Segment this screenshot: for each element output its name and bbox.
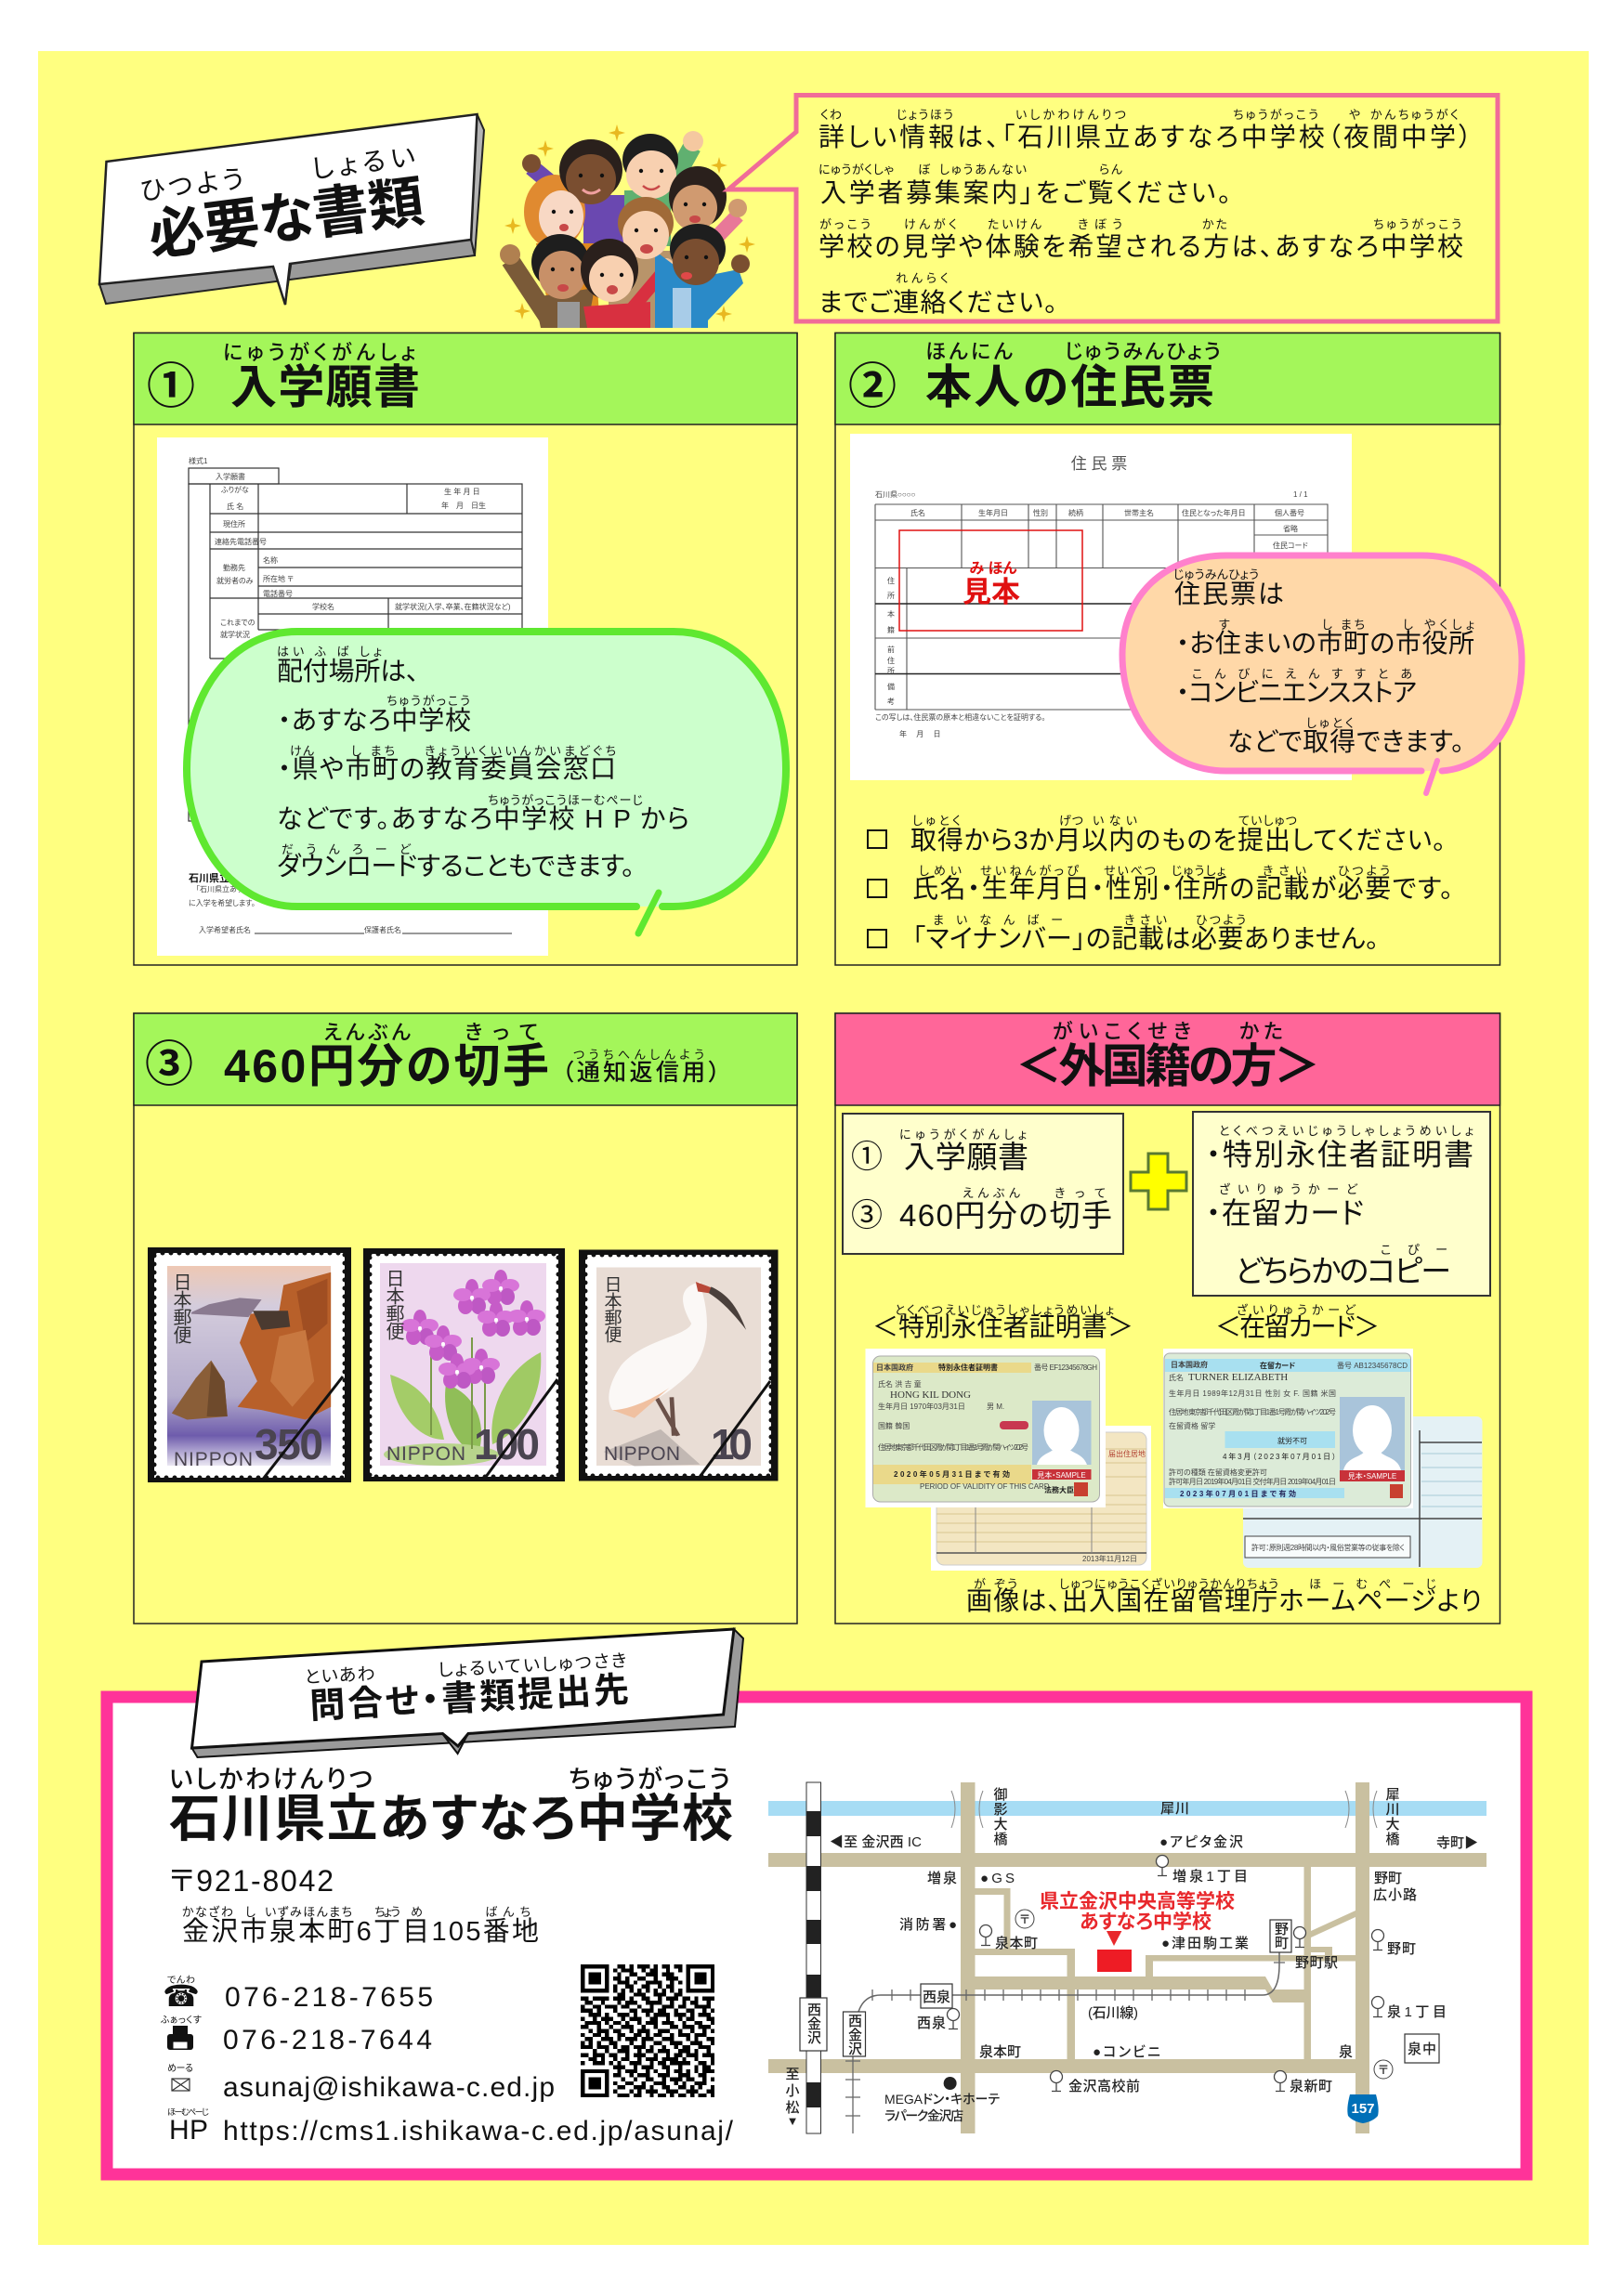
- map labels: 野町駅: [1295, 1955, 1338, 1971]
- checklist item 3: 「マイナンバー」の記載は必要ありません。: [912, 924, 1379, 953]
- callout line 3: [819, 217, 1463, 261]
- homepage row: ほーむぺーじ: [167, 2107, 209, 2117]
- checklist item 2: [868, 864, 1453, 903]
- map labels: ●アピタ金沢: [1159, 1834, 1243, 1850]
- stamp: 100 yen primrose flowers: [363, 1248, 565, 1481]
- bubble text: city hall and convenience store: などで取得できます。: [1227, 727, 1464, 756]
- checklist item 1: 取得から3か月以内のものを提出してください。: [910, 826, 1446, 854]
- image: special permanent resident certificate sample: 見本・SAMPLE: [1037, 1470, 1086, 1480]
- bubble text: where to get forms: きょういくいいんかいまどぐち: [425, 744, 616, 758]
- address: 金沢市泉本町6丁目105番地: [182, 1916, 539, 1947]
- map labels: 寺町▶: [1436, 1835, 1478, 1851]
- panel 3 header: （通知返信用）: [562, 1060, 720, 1086]
- checklist item 2: ひつよう: [1338, 864, 1390, 878]
- panel 1: application form: [134, 333, 797, 965]
- address: ちょう: [374, 1905, 400, 1919]
- panel 4 header: [835, 1013, 1500, 1105]
- panel 1 header: にゅうがくがんしょ: [223, 341, 415, 364]
- panel 1 header: 入学願書: [230, 361, 420, 413]
- roads: [768, 1782, 1486, 2133]
- school location marker: [1040, 1891, 1235, 1972]
- checklist item 2: しめい: [919, 864, 962, 878]
- image: residence card sample: 生年月日 1989年12月31日 性別 女 F. 国籍 米国: [1169, 1389, 1336, 1398]
- map labels: 泉: [1339, 2044, 1353, 2060]
- checklist item 3: きさい: [1124, 913, 1167, 927]
- sample resident certificate image: 住 民 票: [1071, 455, 1127, 473]
- map labels: 泉1丁目: [1387, 2004, 1447, 2020]
- label: residence card: ＜在留カード＞: [1215, 1312, 1380, 1341]
- sample application form image: 連絡先電話番号: [215, 537, 267, 546]
- map labels: 野町: [1374, 1871, 1402, 1886]
- checklist item 1: [868, 814, 1446, 854]
- image: special permanent resident certificate sample: 特別永住者証明書: [938, 1363, 998, 1372]
- stamp: 10 yen crested ibis: 日本郵便: [602, 1275, 622, 1343]
- fax row: ふぁっくす: [161, 2015, 202, 2026]
- title speech bubble: required documents: [99, 114, 484, 305]
- sample resident certificate image: 見本: [963, 576, 1020, 608]
- illustration: cheering diverse group of people: [500, 124, 755, 328]
- panel 2 header: [835, 333, 1500, 424]
- map labels: 泉中: [1408, 2042, 1436, 2057]
- bubble text: where to get forms: はい ふ ば しょ: [277, 645, 382, 659]
- callout line 3: かた: [1202, 217, 1227, 231]
- map labels: 野町: [1387, 1941, 1416, 1957]
- telephone row: [163, 1975, 433, 2014]
- map labels: 増泉1丁目: [1172, 1868, 1248, 1885]
- contact heading speech bubble: 問合せ・書類提出先: [308, 1671, 630, 1727]
- map labels: 増泉: [927, 1870, 957, 1886]
- river: [768, 1801, 1486, 1816]
- sample application form image: 氏 名: [227, 502, 243, 511]
- sample application form image: 勤務先: [223, 563, 245, 572]
- sample resident certificate image: 世帯主名: [1124, 508, 1154, 517]
- address: かなざわ: [182, 1905, 233, 1919]
- homepage row: https://cms1.ishikawa-c.ed.jp/asunaj/: [223, 2116, 734, 2146]
- checklist item 2: 氏名・生年月日・性別・住所の記載が必要です。: [912, 874, 1453, 903]
- image: special permanent resident certificate sample: 日本国政府: [876, 1363, 913, 1372]
- sample application form image: これまでの: [220, 619, 255, 627]
- image: residence card sample: 在留資格 留学: [1169, 1421, 1215, 1430]
- checklist item 2: じゅうしょ: [1172, 864, 1225, 878]
- panel 3 header: 460円分の切手: [224, 1040, 549, 1092]
- box: common documents 1 and 3: [843, 1114, 1123, 1254]
- image: residence card sample: 4年3月（2023年07月01日）: [1223, 1452, 1336, 1461]
- image: residence card sample: 就労不可: [1277, 1436, 1307, 1445]
- image: residence card sample: 2023年07月01日まで有効: [1180, 1489, 1296, 1498]
- map labels: MEGAドン・キホーテ: [884, 2092, 1000, 2107]
- fax row: 076-218-7644: [223, 2025, 432, 2055]
- image: special permanent resident certificate sample: 2020年05月31日まで有効: [894, 1469, 1010, 1479]
- callout line 2: [819, 163, 1231, 207]
- callout line 4: れんらく: [896, 271, 949, 285]
- stamp: 100 yen primrose flowers: NIPPON: [386, 1443, 465, 1465]
- callout line 2: 入学者募集案内」をご覧ください。: [820, 178, 1231, 207]
- contact heading speech bubble: といあわ: [304, 1664, 375, 1688]
- sample resident certificate image: 前: [887, 645, 895, 654]
- image: special permanent resident certificate sample: 氏名 洪 吉 童: [878, 1379, 922, 1389]
- map labels: ●コンビニ: [1093, 2044, 1160, 2060]
- box: common documents 1 and 3: ①: [851, 1140, 883, 1175]
- sample application form image: に入学を希望します。: [189, 898, 255, 907]
- sample resident certificate image: 省略: [1283, 524, 1298, 533]
- checklist item 2: きさい: [1263, 864, 1306, 878]
- callout line 1: いしかわけんりつ: [1015, 108, 1126, 122]
- title speech bubble: required documents: 必要な書類: [145, 170, 427, 267]
- homepage row: HP: [169, 2115, 208, 2146]
- sample application form image: 生 年 月 日: [444, 487, 480, 496]
- route 157 shield: 157: [1351, 2101, 1375, 2117]
- map labels: 〒: [1378, 2063, 1389, 2077]
- panel 2 header: ②: [848, 360, 897, 414]
- checklist item 1: げつ: [1059, 814, 1083, 828]
- callout: more information: [728, 95, 1498, 321]
- box: common documents 1 and 3: ③: [851, 1198, 883, 1233]
- box: residence certificate or card copy: ・在留カード: [1206, 1196, 1364, 1230]
- image: residence card sample: 日本国政府: [1171, 1360, 1208, 1369]
- callout line 1: [819, 108, 1472, 151]
- box: residence certificate or card copy: ・特別永住者証明書: [1206, 1138, 1473, 1171]
- map labels: [785, 1787, 1478, 2128]
- sample application form image: 就学状況: [220, 630, 250, 639]
- Ishikawa line railway: 野町: [1273, 1922, 1289, 1950]
- bubble text: where to get forms: ・県や市町の教育委員会窓口: [278, 754, 616, 783]
- telephone row: ☎: [163, 1978, 200, 2014]
- school location marker: 県立金沢中央高等学校: [1040, 1891, 1235, 1912]
- title speech bubble: required documents: ひつよう: [138, 164, 245, 206]
- image: special permanent resident certificate sample: 生年月日 1970年03月31日: [878, 1402, 965, 1411]
- box: residence certificate or card copy: [1193, 1112, 1490, 1296]
- school name: いしかわけんりつ: [169, 1766, 373, 1794]
- sample resident certificate image: 生年月日: [978, 508, 1008, 517]
- bubble text: where to get forms: ダウンロードすることもできます。: [277, 852, 635, 881]
- box: residence certificate or card copy: ざいりゅうかーど: [1219, 1182, 1358, 1196]
- sample resident certificate image: 氏名: [910, 508, 925, 517]
- fax row: [161, 2015, 432, 2055]
- map labels: 広小路: [1373, 1887, 1417, 1903]
- checklist item 3: [868, 913, 1379, 953]
- callout line 2: にゅうがくしゃ: [819, 163, 894, 176]
- image: residence card sample: 住居地 東京都千代田区霞が関1丁目1番1号霞が関ハイツ202号: [1169, 1407, 1336, 1416]
- sample application form image: 電話番号: [263, 589, 293, 598]
- Ishikawa line railway: 西泉: [923, 1989, 950, 2005]
- callout line 1: 詳しい情報は、「石川県立あすなろ中学校（夜間中学）: [819, 123, 1472, 151]
- sample resident certificate image: 住: [887, 656, 895, 665]
- sample application form image: 年 月 日生: [441, 501, 486, 510]
- map labels: ▼: [787, 2114, 798, 2128]
- image: special permanent resident certificate sample: 法務大臣: [1044, 1485, 1074, 1494]
- panel 2 header: じゅうみんひょう: [1065, 340, 1221, 363]
- callout line 4: までご連絡ください。: [819, 288, 1057, 317]
- checklist item 3: ひつよう: [1196, 913, 1246, 927]
- JR railway line: [800, 1782, 827, 2133]
- sample application form image: 現住所: [223, 519, 245, 528]
- panel 3: postage stamps: [134, 1013, 797, 1624]
- bubble text: city hall and convenience store: じゅうみんひょう: [1173, 567, 1259, 581]
- stamp: 350 yen cliffs: 日本郵便: [170, 1272, 191, 1344]
- bubble text: city hall and convenience store: し やくしょ: [1403, 618, 1474, 632]
- sample resident certificate image: 個人番号: [1275, 508, 1304, 517]
- email row: めーる: [167, 2063, 193, 2074]
- icon: plus sign: [1131, 1154, 1186, 1209]
- sample application form image: 就労者のみ: [216, 576, 254, 585]
- sample application form image: [157, 437, 548, 956]
- bubble text: city hall and convenience store: ・お住まいの市町の市役所: [1176, 629, 1474, 658]
- sample application form image: 入学願書: [216, 472, 245, 481]
- school name: 石川県立あすなろ中学校: [169, 1790, 733, 1847]
- callout line 3: たいけん: [988, 217, 1041, 231]
- image: residence card sample: 在留カード: [1260, 1361, 1296, 1370]
- panel 1 header: ①: [147, 360, 195, 414]
- callout line 1: や: [1349, 108, 1360, 122]
- sample resident certificate image: 備: [887, 682, 895, 691]
- box: residence certificate or card copy: とくべつえいじゅうしゃしょうめいしょ: [1219, 1124, 1473, 1138]
- sample resident certificate image: この写しは、住民票の原本と相違ないことを証明する。: [875, 712, 1045, 722]
- panel 2 header: 本人の住民票: [925, 361, 1214, 413]
- callout line 1: くわ: [820, 108, 842, 122]
- map labels: 小: [785, 2083, 800, 2099]
- bubble text: where to get forms: ちゅうがっこう: [386, 694, 470, 708]
- panel 3 header: きって: [465, 1021, 538, 1044]
- sample application form image: 学校名: [312, 602, 334, 611]
- sample resident certificate image: 住民コード: [1273, 541, 1308, 550]
- map labels: 犀川: [1160, 1801, 1189, 1817]
- stamp: 350 yen cliffs: 350: [255, 1420, 323, 1468]
- map labels: 泉本町: [979, 2044, 1021, 2060]
- bubble text: where to get forms: だ う ん ろ ー ど: [282, 842, 412, 856]
- sample application form image: 所在地 〒: [263, 574, 294, 583]
- school name: ちゅうがっこう: [569, 1766, 730, 1794]
- sample application form image: 就学状況(入学、卒業、在籍状況など): [395, 602, 511, 611]
- telephone row: でんわ: [167, 1975, 195, 1986]
- image credit text: ほ ー む ぺ ー じ: [1309, 1577, 1436, 1591]
- box: common documents 1 and 3: きって: [1054, 1186, 1106, 1200]
- bubble text: city hall and convenience store: し まち: [1322, 618, 1365, 632]
- sample resident certificate image: 本: [887, 609, 895, 619]
- callout line 3: がっこう: [819, 217, 871, 231]
- box: residence certificate or card copy: どちらかのコピー: [1235, 1254, 1451, 1288]
- checklist item 1: いない: [1093, 814, 1137, 828]
- bubble text: city hall and convenience store: ・コンビニエンスストア: [1176, 678, 1417, 707]
- map labels: 至: [785, 2067, 800, 2082]
- box: common documents 1 and 3: にゅうがくがんしょ: [899, 1128, 1027, 1141]
- email row: [167, 2063, 555, 2103]
- postal code: 〒921-8042: [169, 1864, 334, 1898]
- bubble text: where to get forms: などです。あすなろ中学校 H P から: [277, 804, 689, 833]
- box: residence certificate or card copy: こ ぴ ー: [1381, 1243, 1447, 1257]
- stamp: 10 yen crested ibis: NIPPON: [604, 1443, 680, 1465]
- sample resident certificate image: 年 月 日: [899, 729, 940, 738]
- panel 2 header: ほんにん: [925, 340, 1013, 363]
- bubble text: where to get forms: ちゅうがっこうほーむぺーじ: [488, 793, 643, 807]
- address: め: [411, 1905, 423, 1919]
- Ishikawa line railway: [844, 1920, 1291, 2133]
- sample application form image: ふりがな: [221, 485, 249, 494]
- stamp: 350 yen cliffs: NIPPON: [174, 1449, 253, 1470]
- distribution locations speech bubble: [187, 632, 786, 933]
- Ishikawa line railway: (石川線): [1088, 2005, 1138, 2021]
- stamp: 350 yen cliffs: [148, 1247, 351, 1482]
- image: residence card sample: 許可の種類 在留資格変更許可: [1169, 1468, 1267, 1477]
- route 157 shield: [1347, 2094, 1379, 2123]
- image: special permanent resident certificate sample: [866, 1349, 1151, 1571]
- image: special permanent resident certificate sample: 国籍 韓国: [878, 1421, 910, 1430]
- image credit text: しゅつにゅうこくざいりゅうかんりちょう: [1059, 1577, 1278, 1591]
- where to obtain certificate speech bubble: [1122, 555, 1522, 793]
- image: special permanent resident certificate sample: 届出住居地: [1108, 1449, 1146, 1458]
- callout line 1: かんちゅうがく: [1370, 108, 1459, 122]
- checklist item 2: せいべつ: [1104, 864, 1156, 878]
- panel 3 header: つうちへんしんよう: [573, 1048, 704, 1062]
- Ishikawa line railway: 西金沢: [846, 2014, 862, 2055]
- contact heading speech bubble: しょるいていしゅつさき: [438, 1651, 627, 1681]
- sample resident certificate image: 住民となった年月日: [1182, 508, 1246, 517]
- label: special permanent resident certificate: ＜特別永住者証明書＞: [872, 1312, 1133, 1341]
- map labels: 消防署●: [899, 1917, 957, 1933]
- sample resident certificate image: 性別: [1033, 508, 1048, 517]
- map labels: ◀至 金沢西 IC: [830, 1834, 922, 1850]
- sample resident certificate image: 1 / 1: [1293, 490, 1308, 499]
- telephone row: 076-218-7655: [225, 1982, 433, 2013]
- callout line 1: ちゅうがっこう: [1233, 108, 1318, 122]
- map labels: 松: [785, 2100, 800, 2116]
- image: residence card sample: [1163, 1349, 1483, 1568]
- map labels: 泉本町: [995, 1936, 1038, 1951]
- map labels: 〒: [1019, 1912, 1030, 1926]
- panel: contact and submission destination: [107, 1697, 1526, 2174]
- label: residence card: ざいりゅうかーど: [1237, 1303, 1356, 1317]
- panel 3 header: [134, 1013, 797, 1105]
- checklist for resident certificate: [868, 814, 1453, 953]
- sample resident certificate image: み ほん: [969, 560, 1017, 577]
- callout line 3: ちゅうがっこう: [1373, 217, 1461, 231]
- callout line 2: しゅうあんない: [939, 163, 1027, 176]
- checklist item 1: しゅとく: [912, 814, 961, 828]
- bubble text: where to get forms: ・あすなろ中学校: [278, 706, 471, 735]
- sample application form image: 様式1: [189, 456, 208, 465]
- panel 4 header: ＜外国籍の方＞: [1015, 1040, 1320, 1092]
- bubble text: city hall and convenience store: [1173, 567, 1474, 756]
- callout line 2: らん: [1099, 163, 1122, 176]
- sample resident certificate image: [850, 434, 1352, 780]
- bubble text: city hall and convenience store: しゅとく: [1306, 716, 1354, 730]
- image: special permanent resident certificate sample: PERIOD OF VALIDITY OF THIS CARD: [920, 1482, 1050, 1491]
- callout line 3: けんがく: [904, 217, 957, 231]
- sample resident certificate image: 続柄: [1068, 508, 1083, 517]
- bubble text: city hall and convenience store: こ ん び に え ん す す と あ: [1192, 667, 1412, 681]
- panel 2: resident certificate: [835, 333, 1522, 965]
- callout line 4: [819, 271, 1057, 317]
- image: residence card sample: 氏名: [1169, 1373, 1184, 1382]
- image: residence card sample: 許可年月日 2019年04月01日 交付年月日 2019年04月01日: [1169, 1477, 1336, 1486]
- bubble text: city hall and convenience store: 住民票は: [1174, 580, 1284, 608]
- label: special permanent resident certificate: とくべつえいじゅうしゃしょうめいしょ: [895, 1303, 1114, 1317]
- address: ばんち: [485, 1905, 530, 1919]
- image: special permanent resident certificate sample: 2013年11月12日: [1082, 1554, 1137, 1563]
- panel 3 header: ③: [145, 1038, 193, 1092]
- callout line 3: 学校の見学や体験を希望される方は、あすなろ中学校: [819, 232, 1463, 261]
- school location marker: あすなろ中学校: [1080, 1911, 1211, 1933]
- email row: asunaj@ishikawa-c.ed.jp: [223, 2072, 555, 2103]
- panel 1 header: [134, 333, 797, 424]
- image: special permanent resident certificate sample: HONG KIL DONG: [890, 1389, 971, 1401]
- sample application form image: 入学希望者氏名: [199, 925, 251, 934]
- map labels: ●GS: [980, 1871, 1015, 1886]
- image: residence card sample: TURNER ELIZABETH: [1188, 1372, 1288, 1383]
- box: common documents 1 and 3: えんぶん: [963, 1186, 1020, 1200]
- image: special permanent resident certificate sample: 住居地 東京都千代田区霞が関1丁目1番1号霞が関ハイツ202号: [878, 1442, 1028, 1452]
- sample resident certificate image: 石川県○○○○: [875, 490, 915, 499]
- sample resident certificate image: 所: [887, 666, 895, 675]
- box: common documents 1 and 3: 入学願書: [904, 1140, 1028, 1174]
- image: residence card sample: 番号 AB12345678CD: [1337, 1361, 1408, 1370]
- stamp: 100 yen primrose flowers: 日本郵便: [383, 1269, 404, 1340]
- map labels: 泉新町: [1290, 2079, 1332, 2094]
- map labels: 犀川大橋: [1384, 1787, 1399, 1846]
- stamp: 10 yen crested ibis: [579, 1250, 779, 1481]
- checklist item 2: せいねんがっぴ: [980, 864, 1079, 878]
- bubble text: where to get forms: けん: [290, 744, 314, 758]
- sample resident certificate image: 所: [887, 591, 895, 600]
- bubble text: city hall and convenience store: す: [1219, 618, 1230, 632]
- map labels: 金沢高校前: [1068, 2079, 1140, 2094]
- bubble text: where to get forms: 配付場所は、: [277, 657, 419, 685]
- QR code: [581, 1966, 714, 2095]
- bubble text: where to get forms: [277, 645, 689, 881]
- contact heading speech bubble: [191, 1629, 743, 1757]
- checklist item 1: ていしゅつ: [1238, 814, 1297, 828]
- map labels: 西泉: [917, 2016, 946, 2031]
- bubble text: where to get forms: し まち: [351, 744, 395, 758]
- sample application form image: 「石川県立あすな: [196, 884, 251, 894]
- image: residence card sample: 見本・SAMPLE: [1348, 1471, 1396, 1481]
- panel 4: for foreign nationals: [835, 1013, 1500, 1624]
- image credit text: が ぞう: [974, 1577, 1017, 1591]
- panel 4 header: がいこくせき: [1053, 1020, 1191, 1043]
- image credit text: 画像は、出入国在留管理庁ホームページより: [966, 1586, 1482, 1615]
- map labels: 御影大橋: [992, 1787, 1007, 1846]
- callout line 2: ぼ: [918, 163, 930, 176]
- title speech bubble: required documents: しょるい: [310, 142, 417, 184]
- JR railway line: 西金沢: [805, 2002, 821, 2044]
- address: いずみほんまち: [265, 1905, 352, 1919]
- image: residence card sample: 許可：原則週28時間以内・風俗営業等の従事を除く: [1251, 1543, 1405, 1552]
- sample resident certificate image: 住: [887, 576, 895, 585]
- callout line 1: じょうほう: [897, 108, 953, 122]
- stamp: 100 yen primrose flowers: 100: [474, 1420, 540, 1468]
- sample resident certificate image: 考: [887, 698, 895, 706]
- address: し: [245, 1905, 255, 1919]
- panel 3 header: えんぶん: [323, 1021, 411, 1044]
- panel 4 header: かた: [1239, 1020, 1283, 1043]
- sample application form image: 名称: [263, 555, 278, 565]
- image: special permanent resident certificate sample: 男 M.: [987, 1402, 1004, 1411]
- checklist item 3: まいなんばー: [933, 913, 1063, 927]
- image: special permanent resident certificate sample: 番号 EF12345678GH: [1034, 1363, 1097, 1372]
- map labels: ●津田駒工業: [1161, 1936, 1249, 1951]
- sample resident certificate image: 籍: [887, 625, 895, 634]
- callout line 3: きぼう: [1078, 217, 1122, 231]
- sample application form image: 石川県立: [189, 871, 229, 884]
- stamp: 10 yen crested ibis: 10: [711, 1420, 753, 1468]
- sample application form image: 保護者氏名: [364, 925, 401, 934]
- access map: [768, 1782, 1486, 2133]
- map labels: ラパーク金沢店: [884, 2108, 963, 2123]
- box: common documents 1 and 3: 460円分の切手: [899, 1198, 1112, 1233]
